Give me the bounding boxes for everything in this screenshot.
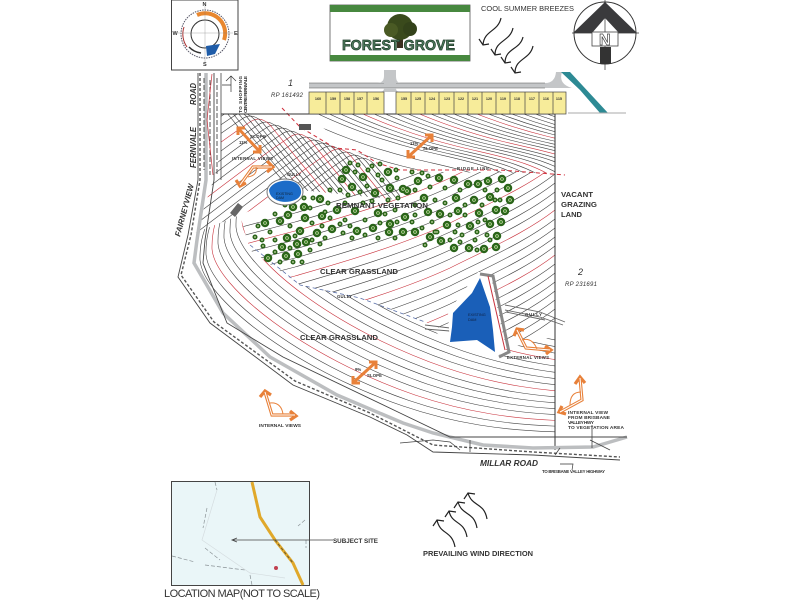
large existing dam: [448, 272, 509, 357]
orange slope arrows: [238, 128, 432, 383]
direction to shopping centre: CENTRE FERNVALE: [243, 76, 248, 113]
land labels: GRAZING: [561, 200, 597, 209]
roads: [178, 73, 627, 460]
compass rose panel: E: [234, 31, 238, 37]
icon: summer breeze arrows: [479, 18, 533, 73]
land labels: LAND: [561, 210, 583, 219]
small annotations: [232, 134, 605, 474]
small annotations: 9%: [355, 367, 361, 372]
lots: north subdivision: 124: [429, 97, 436, 101]
lots: north subdivision: 158: [344, 97, 350, 101]
ridge line: [282, 108, 565, 175]
lots: north subdivision: 156: [373, 97, 379, 101]
compass rose panel: [172, 0, 238, 70]
land labels: [300, 190, 597, 342]
small annotations: 11%: [239, 140, 248, 145]
small existing dam: [267, 179, 303, 205]
small existing dam: EXISTING: [276, 192, 293, 196]
lots: north subdivision: 118: [514, 97, 520, 101]
compass rose panel: W: [172, 31, 178, 37]
arrow to Brisbane Valley Highway: [560, 464, 573, 470]
direction to shopping centre: TO SHOPPING: [238, 76, 243, 113]
orange internal and external view arrows: [236, 161, 585, 420]
internal view note: [568, 410, 625, 431]
road labels: ROAD: [189, 83, 198, 105]
gully drainage near large dam: [425, 305, 565, 331]
internal view note: VALLEY HWY: [568, 420, 595, 426]
icon: north point: N: [599, 32, 611, 49]
small annotations: GULLY: [525, 312, 542, 317]
location map: [172, 482, 333, 586]
small annotations: RIDGE LINE: [457, 166, 489, 171]
shed west: [230, 203, 243, 217]
site contour map: [196, 114, 554, 432]
prevailing wind label: PREVAILING WIND DIRECTION: [423, 549, 533, 558]
large existing dam: EXISTING: [468, 313, 486, 317]
lots: north subdivision: 159: [330, 97, 336, 101]
compass rose panel: N: [202, 2, 206, 8]
small existing dam: DAM: [276, 196, 284, 200]
lots: north subdivision: 119: [500, 97, 506, 101]
small annotations: EXTERNAL VIEWS: [507, 355, 549, 360]
small annotations: SLOPE: [250, 134, 266, 139]
lots: north subdivision: 120: [486, 97, 492, 101]
small annotations: SLOPE: [423, 146, 438, 151]
small annotations: GULLY: [287, 172, 301, 177]
road labels: MILLAR ROAD: [480, 459, 538, 468]
land labels: CLEAR GRASSLAND: [320, 267, 399, 276]
icon: north point: [572, 0, 639, 70]
small annotations: 11%: [410, 141, 419, 146]
lots: north subdivision: 160: [315, 97, 321, 101]
small annotations: SLOPE: [367, 373, 382, 378]
large existing dam: DAM: [468, 318, 476, 322]
teal drainage channel: [561, 72, 608, 113]
land labels: CLEAR GRASSLAND: [300, 333, 379, 342]
lots: north subdivision: 121: [472, 97, 478, 101]
parcel labels: RP 231691: [565, 282, 597, 288]
road labels: [173, 83, 538, 468]
road labels: FERNVALE: [189, 126, 198, 168]
parcel labels: 2: [577, 267, 583, 277]
view arrow inner highlights: [240, 167, 582, 415]
lots: north subdivision: 125: [415, 97, 421, 101]
parcel labels: RP 161492: [271, 93, 304, 99]
remnant vegetation trees: [255, 163, 510, 262]
gully line: [250, 245, 425, 322]
land labels: VACANT: [561, 190, 593, 199]
lots: north subdivision: 123: [444, 97, 450, 101]
road labels: FAIRNEYVIEW: [173, 182, 196, 238]
internal view note: TO VEGETATION AREA: [568, 425, 625, 431]
parcel labels: 1: [288, 78, 293, 88]
lots: north subdivision: 157: [357, 97, 363, 101]
cool summer breezes label: COOL SUMMER BREEZES: [481, 4, 574, 13]
internal view note: INTERNAL VIEW: [568, 410, 608, 416]
icon: prevailing wind arrows: [433, 493, 487, 547]
internal view note: FROM BRISBANE: [568, 415, 611, 421]
land labels: REMNANT VEGETATION: [336, 201, 428, 210]
subject site label: SUBJECT SITE: [333, 539, 378, 545]
site boundary: [221, 103, 555, 450]
lots: north subdivision: 155: [401, 97, 407, 101]
parcel labels: [271, 78, 597, 288]
shed north: [299, 124, 311, 130]
lots: north subdivision: 116: [543, 97, 549, 101]
lots: north subdivision: 117: [529, 97, 535, 101]
lots: north subdivision: [309, 70, 572, 114]
small annotations: TO BRISBANE VALLEY HIGHWAY: [542, 469, 605, 474]
direction to shopping centre: [222, 76, 248, 113]
small annotations: INTERNAL VIEWS: [259, 423, 302, 429]
small annotations: GULLY: [337, 294, 352, 299]
logo: [330, 5, 470, 61]
small annotations: INTERNAL VIEWS: [232, 156, 273, 161]
location map caption: LOCATION MAP(NOT TO SCALE): [164, 588, 320, 600]
lots: north subdivision: 115: [556, 97, 562, 101]
lots: north subdivision: 122: [458, 97, 464, 101]
compass rose panel: S: [203, 62, 207, 68]
logo: FOREST GROVE: [342, 37, 455, 54]
